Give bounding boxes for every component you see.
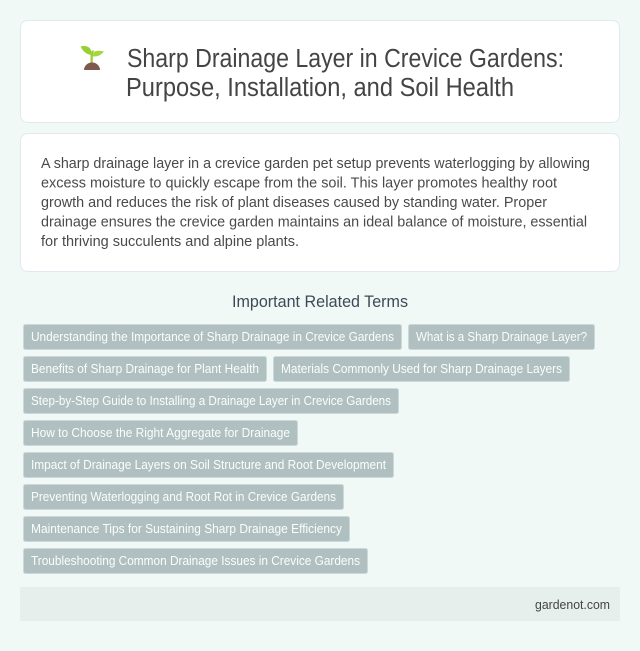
description text: excess moisture to quickly escape from the soil. This layer promotes healthy root xyxy=(41,174,558,192)
tag: materials: Materials Commonly Used for Sharp Drainage Layers xyxy=(281,362,562,376)
tag: benefits: Benefits of Sharp Drainage for Plant Health xyxy=(31,362,259,376)
tag: choose aggregate: How to Choose the Right Aggregate for Drainage xyxy=(31,426,290,440)
tag: impact on soil structure xyxy=(24,452,394,478)
tag: benefits xyxy=(24,356,266,382)
tag: what is a sharp drainage layer: What is a Sharp Drainage Layer? xyxy=(416,330,587,344)
icon: seedling xyxy=(80,46,104,70)
tag: step-by-step guide: Step-by-Step Guide to Installing a Drainage Layer in Crevice Gardens xyxy=(31,394,391,408)
heading: important related terms: Important Related Terms xyxy=(232,293,408,311)
tag: step-by-step guide xyxy=(24,388,398,414)
tag: impact on soil structure: Impact of Drainage Layers on Soil Structure and Root Development xyxy=(31,458,386,472)
tag: maintenance tips xyxy=(24,516,350,542)
footer text: gardenot.com xyxy=(535,597,610,612)
tag: understanding importance xyxy=(24,324,402,350)
description text: A sharp drainage layer in a crevice garden pet setup prevents waterlogging by allowing xyxy=(41,155,590,172)
title xyxy=(126,45,564,102)
panel: header card xyxy=(20,20,620,122)
tag: troubleshooting: Troubleshooting Common Drainage Issues in Crevice Gardens xyxy=(31,554,360,568)
description text: drainage ensures the crevice garden maintains an ideal balance of moisture, essential xyxy=(41,214,587,230)
panel: related term tags xyxy=(24,324,594,574)
tag: preventing waterlogging: Preventing Waterlogging and Root Rot in Crevice Gardens xyxy=(31,490,336,504)
tag: what is a sharp drainage layer xyxy=(408,324,594,350)
description text: growth and reduces the risk of plant diseases caused by standing water. Proper xyxy=(41,194,547,211)
tag: maintenance tips: Maintenance Tips for Sustaining Sharp Drainage Efficiency xyxy=(31,522,343,536)
tag: choose aggregate xyxy=(24,420,298,446)
title: Purpose, Installation, and Soil Health xyxy=(126,74,514,102)
tag: understanding importance: Understanding the Importance of Sharp Drainage in Crevice Gardens xyxy=(31,330,394,344)
tag: materials xyxy=(274,356,570,382)
tag: troubleshooting xyxy=(24,548,368,574)
title: Sharp Drainage Layer in Crevice Gardens: xyxy=(127,45,564,73)
description text: for thriving succulents and alpine plants. xyxy=(41,233,299,250)
footer xyxy=(20,587,620,621)
description text xyxy=(41,155,590,250)
panel: description card xyxy=(20,134,620,272)
tag: preventing waterlogging xyxy=(24,484,344,510)
